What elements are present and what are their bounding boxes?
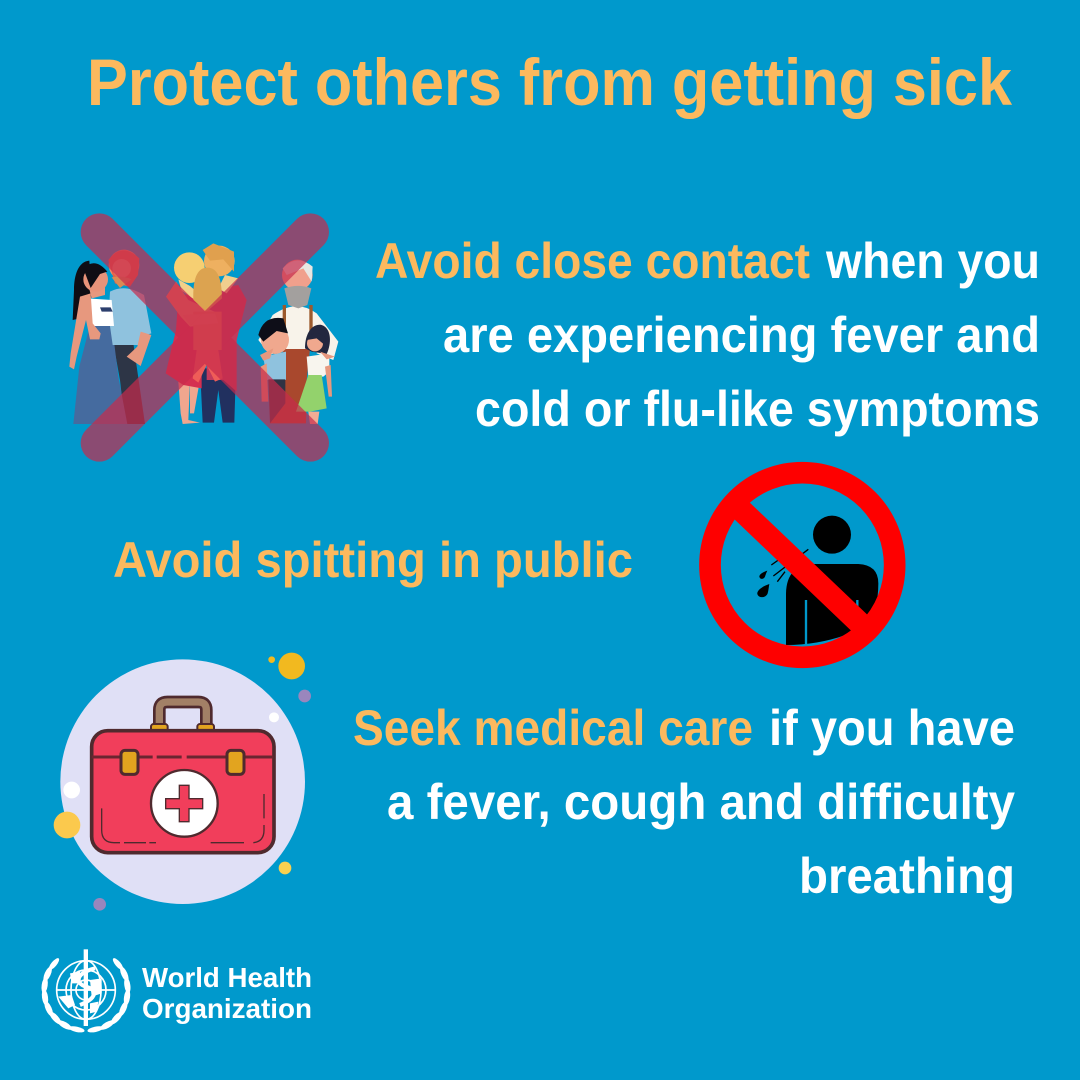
text block: avoid close contact: when you (825, 233, 1040, 289)
icon: red cross-out (99, 232, 310, 443)
text: organization name: World Health (142, 962, 312, 993)
illustration: grandfather with children (258, 260, 338, 424)
text: organization name (142, 962, 312, 1024)
icon: background circle (60, 659, 305, 904)
text block: seek medical care: if you have (769, 700, 1015, 756)
logo: World Health Organization (41, 949, 312, 1034)
icon: medical case (92, 702, 274, 853)
text block: avoid close contact (375, 233, 1040, 437)
icon: person spitting (757, 516, 878, 645)
text block: avoid close contact: cold or flu-like symptoms (475, 381, 1040, 437)
text block: avoid close contact: Avoid close contact (375, 233, 810, 289)
text block: seek medical care: breathing (799, 848, 1015, 904)
decorative dots (54, 653, 311, 911)
text: organization name: Organization (142, 993, 312, 1024)
text block: avoid close contact: are experiencing fever and (443, 307, 1040, 363)
illustration: couple (69, 250, 151, 424)
text block: seek medical care: Seek medical care (353, 700, 753, 756)
icon: no spitting sign (710, 473, 895, 657)
panel: first aid illustration (54, 653, 311, 911)
panel: avoid close contact illustration (69, 232, 338, 443)
icon: WHO emblem (41, 949, 131, 1034)
text block: seek medical care (353, 700, 1015, 904)
title: Protect others from getting sick (87, 45, 1012, 119)
icon: red prohibition ring (710, 473, 895, 657)
text block: avoid spitting: Avoid spitting in public (113, 532, 633, 588)
text block: seek medical care: a fever, cough and difficulty (387, 774, 1015, 830)
illustration: embracing family (166, 243, 247, 424)
